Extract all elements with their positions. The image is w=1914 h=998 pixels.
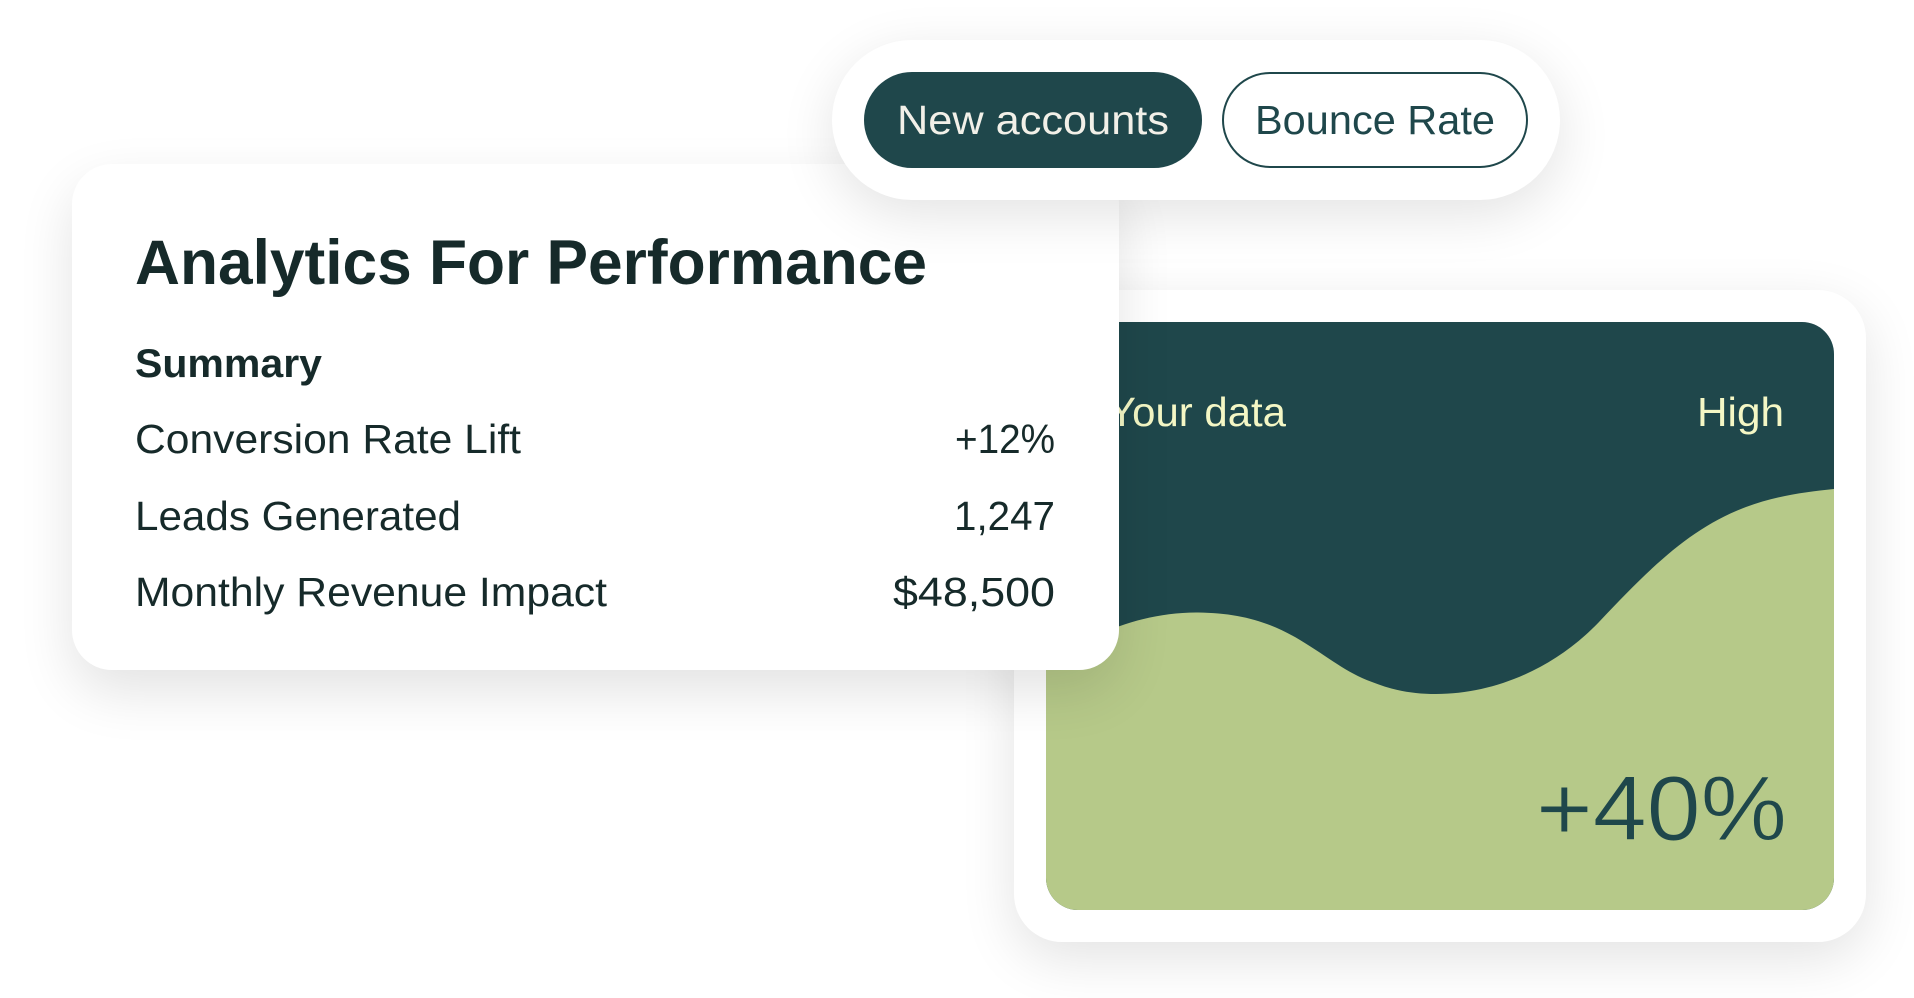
subheading: Summary: Summary — [135, 342, 323, 386]
row: conversion rate lift — [135, 416, 1055, 462]
metric: +40%: +40% — [1536, 758, 1787, 860]
button: Bounce Rate — [1223, 73, 1527, 167]
heading: Analytics For Performance: Analytics For Performance — [135, 228, 927, 298]
panel: wave chart card — [1014, 290, 1866, 959]
row: monthly revenue impact: Monthly Revenue Impact — [135, 569, 608, 615]
panel: analytics summary card — [72, 164, 1119, 692]
button: Bounce Rate: Bounce Rate — [1255, 97, 1495, 143]
row: leads generated — [135, 493, 1055, 539]
row: monthly revenue impact — [135, 569, 1055, 615]
panel: metric toggle pills — [832, 40, 1560, 200]
button: New accounts (active): New accounts — [897, 97, 1169, 143]
row: conversion rate lift: Conversion Rate Lift — [135, 416, 522, 462]
row: leads generated: 1,247 — [954, 493, 1055, 539]
label: Your data: Your data — [1108, 389, 1286, 435]
chart: dark background — [1046, 322, 1834, 910]
button: New accounts (active) — [864, 72, 1202, 168]
row: conversion rate lift: +12% — [955, 416, 1055, 462]
row: monthly revenue impact: $48,500 — [893, 569, 1055, 615]
label: High: High — [1697, 389, 1784, 435]
chart: green wave area — [1046, 489, 1834, 910]
row: leads generated: Leads Generated — [135, 493, 461, 539]
